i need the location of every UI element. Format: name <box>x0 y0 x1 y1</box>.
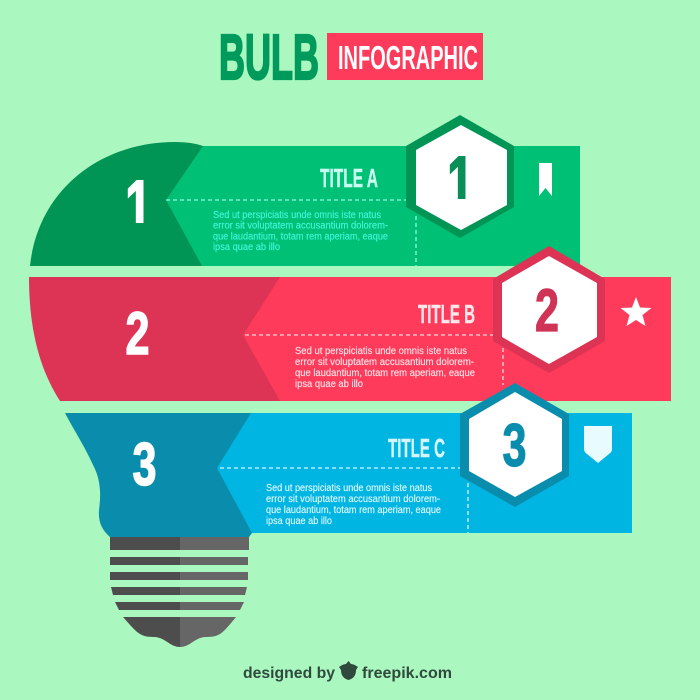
panel: title B: Sed ut perspiciatis unde omnis iste natus <box>295 346 467 357</box>
title: BULB <box>219 21 319 93</box>
panel: title B: ipsa quae ab illo <box>295 379 364 390</box>
panel: title C: TITLE C <box>388 433 445 463</box>
hexagon badge 2 <box>493 246 605 373</box>
hexagon badge 1 <box>406 115 514 238</box>
footer credit: freepik.com <box>362 665 452 682</box>
footer credit <box>243 661 452 682</box>
panel: title B <box>29 277 671 401</box>
panel: title A <box>30 142 580 266</box>
panel: title C: error sit voluptatem accusantium dolorem- <box>266 494 440 505</box>
panel: title C: ipsa quae ab illo <box>266 516 333 527</box>
title: INFOGRAPHIC <box>338 39 478 76</box>
panel: title B: 2 <box>126 300 150 367</box>
panel: title B: error sit voluptatem accusantium dolorem- <box>295 357 474 368</box>
bulb screw base <box>110 537 249 647</box>
panel: title A: TITLE A <box>320 163 378 193</box>
panel: title A: error sit voluptatem accusantium dolorem- <box>213 220 388 232</box>
hexagon badge 2: 2 <box>535 277 559 344</box>
panel: title C <box>65 413 632 537</box>
panel: title C: 3 <box>132 431 156 498</box>
title <box>219 21 483 93</box>
panel: title A: ipsa quae ab illo <box>213 242 281 253</box>
panel: title C: que laudantium, totam rem aperiam, eaque <box>266 505 442 516</box>
icon: bookmark <box>539 163 552 196</box>
panel: title C: Sed ut perspiciatis unde omnis iste natus <box>266 483 432 494</box>
panel: title A: que laudantium, totam rem aperiam, eaque <box>213 232 389 242</box>
icon: star <box>620 297 652 326</box>
icon: freepik mascot <box>339 661 358 680</box>
panel: title A: 1 <box>125 165 152 248</box>
icon: shield <box>584 426 612 463</box>
panel: title B: TITLE B <box>418 299 475 329</box>
footer credit: designed by <box>243 665 335 682</box>
panel: title B: que laudantium, totam rem aperiam, eaque <box>295 368 476 379</box>
hexagon badge 3 <box>460 383 569 507</box>
hexagon badge 1: 1 <box>447 141 474 224</box>
panel: title A: Sed ut perspiciatis unde omnis iste natus <box>213 210 381 221</box>
hexagon badge 3: 3 <box>502 412 526 479</box>
